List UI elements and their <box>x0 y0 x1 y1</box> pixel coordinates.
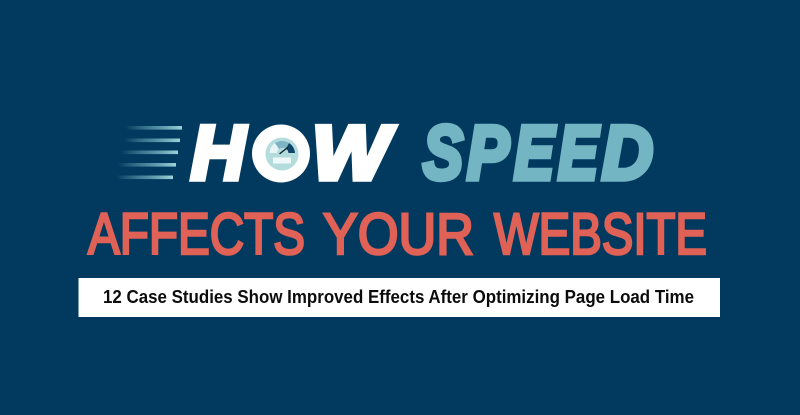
heading line: affects your website: AFFECTS <box>88 202 305 267</box>
subtitle banner <box>78 278 720 317</box>
icon: speed lines <box>116 126 182 179</box>
heading line: affects your website <box>88 202 707 267</box>
heading word: SPEED <box>423 111 653 196</box>
heading word: HOW <box>191 111 396 196</box>
heading word: SPEED: E <box>514 111 556 196</box>
heading line: affects your website: YOUR <box>323 202 474 267</box>
heading line: affects your website: WEBSITE <box>494 202 707 267</box>
subtitle banner: 12 Case Studies Show Improved Effects After Optimizing Page Load Time <box>103 286 694 307</box>
heading word: SPEED: E <box>558 111 600 196</box>
heading word: HOW: H <box>191 111 247 196</box>
icon: speedometer <box>266 138 298 170</box>
heading word: SPEED: D <box>602 111 653 196</box>
heading word: SPEED: S <box>423 111 463 196</box>
letter O disc <box>252 124 310 182</box>
heading word: HOW: W <box>312 111 396 196</box>
heading word: SPEED: P <box>467 111 509 196</box>
